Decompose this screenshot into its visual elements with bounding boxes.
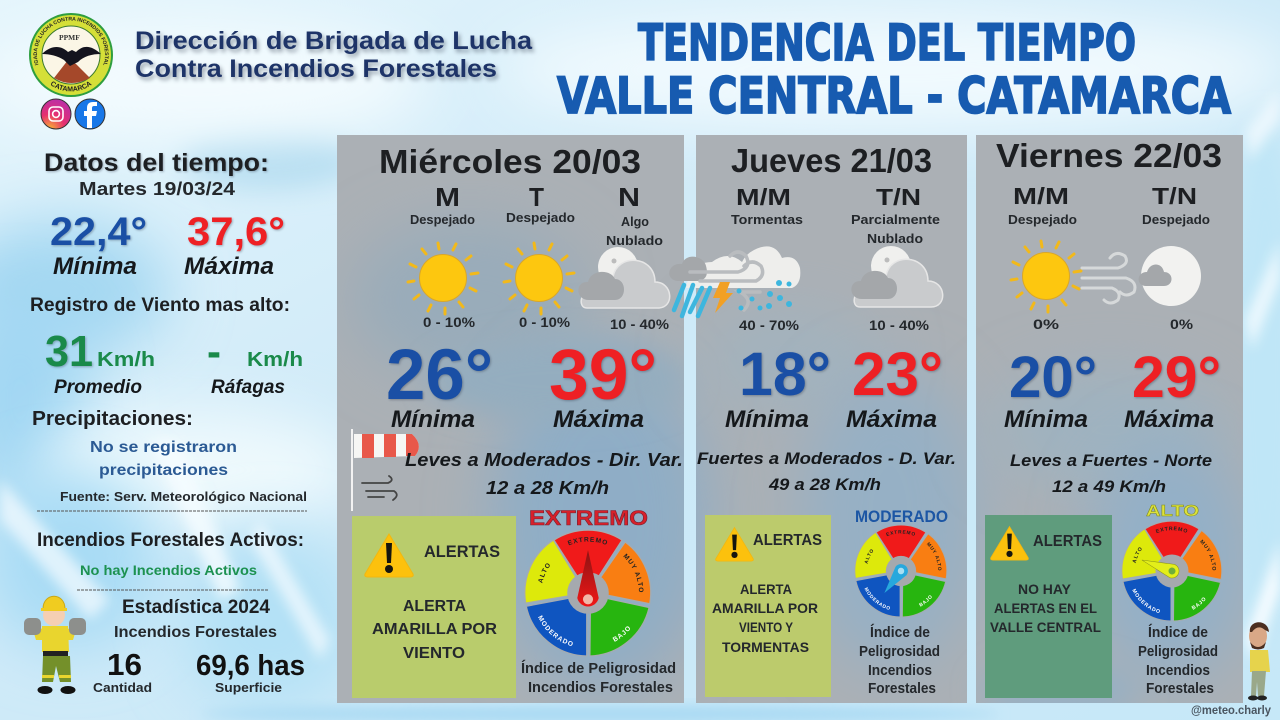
heading: organisation: Contra Incendios Forestales xyxy=(135,55,497,83)
panel: miercoles: 10 - 40% xyxy=(610,316,670,332)
panel: registro de viento: Registro de Viento mas alto: xyxy=(30,295,290,316)
gauge: extremo: MODERADO xyxy=(538,615,573,646)
panel: estadistica: 16 xyxy=(107,647,142,682)
panel: jueves: 49 a 28 Km/h xyxy=(768,475,881,494)
alert box: TORMENTAS xyxy=(722,639,809,655)
gauge: alto: ALTO xyxy=(1146,503,1199,520)
panel: miercoles: 26° xyxy=(386,336,493,415)
panel: jueves: Fuertes a Moderados - D. Var. xyxy=(697,449,956,468)
alert box: VIENTO xyxy=(403,645,465,662)
panel: precipitaciones: No se registraron xyxy=(90,439,237,456)
credit: @meteo.charly xyxy=(1191,703,1271,717)
heading: organisation: Dirección de Brigada de Lucha xyxy=(135,27,533,55)
alert box xyxy=(352,516,516,698)
panel: viernes: 0% xyxy=(1033,316,1060,332)
gauge: moderado: MODERADO xyxy=(864,587,890,610)
icon: cloud night xyxy=(851,246,943,307)
logo: PPMF xyxy=(59,33,80,42)
alert box: VALLE CENTRAL xyxy=(990,619,1101,635)
panel: viernes: Despejado xyxy=(1142,212,1210,227)
panel: datos del tiempo: Martes 19/03/24 xyxy=(79,179,235,199)
gauge: extremo xyxy=(524,507,652,656)
title xyxy=(557,14,1231,125)
panel: viernes: Máxima xyxy=(1124,406,1214,433)
icon: firefighter xyxy=(24,596,86,694)
panel: viernes: 29° xyxy=(1132,345,1221,410)
gauge: moderado xyxy=(854,508,948,618)
panel: miercoles: Máxima xyxy=(553,406,644,433)
panel: jueves: Parcialmente xyxy=(851,212,940,227)
panel: miercoles: 0 - 10% xyxy=(519,314,571,330)
panel: miercoles: Leves a Moderados - Dir. Var. xyxy=(405,450,683,470)
alert box: AMARILLA POR xyxy=(372,621,497,638)
gauge: extremo: EXTREMO xyxy=(529,507,648,530)
panel: miercoles: Nublado xyxy=(606,233,663,248)
alert box: ALERTAS xyxy=(424,542,500,561)
panel: datos del tiempo: Máxima xyxy=(184,253,274,280)
panel: viernes: Forestales xyxy=(1146,681,1214,697)
panel: miercoles: 0 - 10% xyxy=(423,314,476,330)
panel: miercoles: 12 a 28 Km/h xyxy=(486,478,609,498)
panel: registro de viento: Km/h xyxy=(247,349,303,371)
panel: jueves: Peligrosidad xyxy=(859,644,940,660)
panel: viernes: M/M xyxy=(1013,183,1069,209)
icon: meteorologist character xyxy=(1248,622,1270,700)
panel: registro de viento: 31 xyxy=(45,327,93,376)
gauge: alto xyxy=(1122,503,1222,622)
icon: instagram xyxy=(41,99,71,129)
gauge: extremo: BAJO xyxy=(612,626,630,642)
panel: registro de viento xyxy=(30,295,303,398)
panel: datos del tiempo: 22,4° xyxy=(50,210,147,254)
panel: precipitaciones xyxy=(32,408,307,511)
panel: jueves: M/M xyxy=(736,184,791,210)
gauge: extremo: EXTREMO xyxy=(568,537,608,546)
panel: jueves: 23° xyxy=(852,340,943,408)
panel: viernes: Peligrosidad xyxy=(1138,644,1218,660)
panel: viernes: 12 a 49 Km/h xyxy=(1052,477,1166,496)
gauge: alto: MODERADO xyxy=(1132,588,1160,613)
panel: viernes: Viernes 22/03 xyxy=(996,137,1222,174)
alert box: VIENTO Y xyxy=(739,619,794,635)
alert box: ALERTA xyxy=(403,598,466,615)
gauge: alto: BAJO xyxy=(1191,598,1206,610)
alert box: ALERTAS xyxy=(753,532,822,549)
panel: jueves xyxy=(640,142,956,697)
panel: jueves: Máxima xyxy=(846,406,937,433)
panel: jueves: Índice de xyxy=(870,624,930,641)
panel: miercoles: Despejado xyxy=(410,212,475,227)
panel: miercoles: 39° xyxy=(549,336,657,415)
panel: jueves: 10 - 40% xyxy=(869,317,930,333)
panel: registro de viento: Ráfagas xyxy=(211,377,285,398)
panel: registro de viento: Promedio xyxy=(54,377,142,398)
panel: estadistica: Incendios Forestales xyxy=(114,624,277,641)
panel: viernes: Incendios xyxy=(1146,663,1210,679)
panel backgrounds xyxy=(330,130,1250,720)
icon: facebook xyxy=(75,99,105,129)
panel: datos del tiempo: 37,6° xyxy=(187,210,285,254)
panel: miercoles: Índice de Peligrosidad xyxy=(521,660,676,677)
alert box xyxy=(985,515,1112,698)
alert box: NO HAY xyxy=(1018,581,1072,597)
panel: miercoles: Incendios Forestales xyxy=(528,680,673,696)
icon: cloud night xyxy=(578,247,670,308)
panel: incendios activos xyxy=(37,530,304,590)
alert box: ALERTAS EN EL xyxy=(994,600,1097,616)
panel: datos del tiempo: Datos del tiempo: xyxy=(44,149,269,177)
panel: viernes: Leves a Fuertes - Norte xyxy=(1010,451,1212,470)
panel: estadistica: Cantidad xyxy=(93,680,152,695)
icon: moon and cloud xyxy=(1139,246,1201,306)
gauge: alto: EXTREMO xyxy=(1156,526,1188,534)
gauge: moderado: EXTREMO xyxy=(886,530,915,536)
panel: jueves: Jueves 21/03 xyxy=(731,142,932,179)
logo: CATAMARCA xyxy=(51,82,92,92)
panel: estadistica: Estadística 2024 xyxy=(122,597,270,618)
icon: storm and wind xyxy=(669,246,800,316)
gauge: extremo: ALTO xyxy=(538,563,550,584)
icon: sun and wind xyxy=(1011,241,1135,312)
panel: jueves: Mínima xyxy=(725,406,809,433)
panel: miercoles: Mínima xyxy=(391,406,475,433)
gauge: moderado: MUY ALTO xyxy=(926,542,942,570)
logo xyxy=(29,13,113,97)
panel: estadistica: Superficie xyxy=(215,680,282,695)
panel: jueves: 18° xyxy=(739,340,831,408)
panel: registro de viento: - xyxy=(207,327,221,376)
panel: viernes: T/N xyxy=(1152,183,1197,209)
panel: miercoles xyxy=(351,143,683,698)
panel: incendios activos: No hay Incendios Activos xyxy=(80,562,257,578)
panel: registro de viento: Km/h xyxy=(97,349,155,371)
icon: windsock xyxy=(351,429,419,511)
alert box: AMARILLA POR xyxy=(712,600,818,616)
gauge: moderado: MODERADO xyxy=(855,508,948,526)
panel: viernes xyxy=(985,137,1262,698)
gauge: moderado: BAJO xyxy=(918,595,932,607)
panel: jueves: Forestales xyxy=(868,681,936,697)
panel: miercoles: Algo xyxy=(621,214,649,229)
panel: datos del tiempo: Mínima xyxy=(53,253,137,280)
gauge: alto: MUY ALTO xyxy=(1200,540,1216,570)
panel: miercoles: M xyxy=(435,182,460,212)
heading: organisation xyxy=(135,27,533,83)
panel: estadistica xyxy=(93,597,305,695)
gauge: moderado: ALTO xyxy=(864,549,874,564)
icon: sun afternoon xyxy=(504,243,574,314)
panel: miercoles: Despejado xyxy=(506,210,575,225)
panel: viernes: 20° xyxy=(1009,345,1097,410)
panel: precipitaciones: Precipitaciones: xyxy=(32,408,193,430)
panel: miercoles: N xyxy=(618,182,640,212)
alert box xyxy=(705,515,831,697)
alert box: ALERTAS xyxy=(1033,533,1102,550)
gauge: alto: ALTO xyxy=(1132,547,1142,564)
panel: jueves: Incendios xyxy=(868,663,932,679)
gauge: extremo: MUY ALTO xyxy=(623,554,644,592)
alert box: ALERTA xyxy=(740,581,792,597)
panel: miercoles: Miércoles 20/03 xyxy=(379,143,641,180)
panel: estadistica: 69,6 has xyxy=(196,650,305,682)
panel: miercoles: T xyxy=(529,182,544,212)
panel: viernes: Mínima xyxy=(1004,406,1088,433)
panel: viernes: 0% xyxy=(1170,316,1194,332)
panel: incendios activos: Incendios Forestales Activos: xyxy=(37,530,304,551)
panel: viernes: Índice de xyxy=(1148,624,1208,641)
panel: jueves: T/N xyxy=(876,184,921,210)
panel: datos del tiempo xyxy=(44,149,285,280)
panel: viernes: Despejado xyxy=(1008,212,1077,227)
panel: jueves: 40 - 70% xyxy=(739,317,800,333)
panel: jueves: Tormentas xyxy=(731,212,803,227)
panel: precipitaciones: precipitaciones xyxy=(99,462,228,479)
panel: precipitaciones: Fuente: Serv. Meteorológico Nacional xyxy=(60,489,307,504)
panel: jueves: Nublado xyxy=(867,231,923,246)
icon: sun morning xyxy=(408,243,478,314)
